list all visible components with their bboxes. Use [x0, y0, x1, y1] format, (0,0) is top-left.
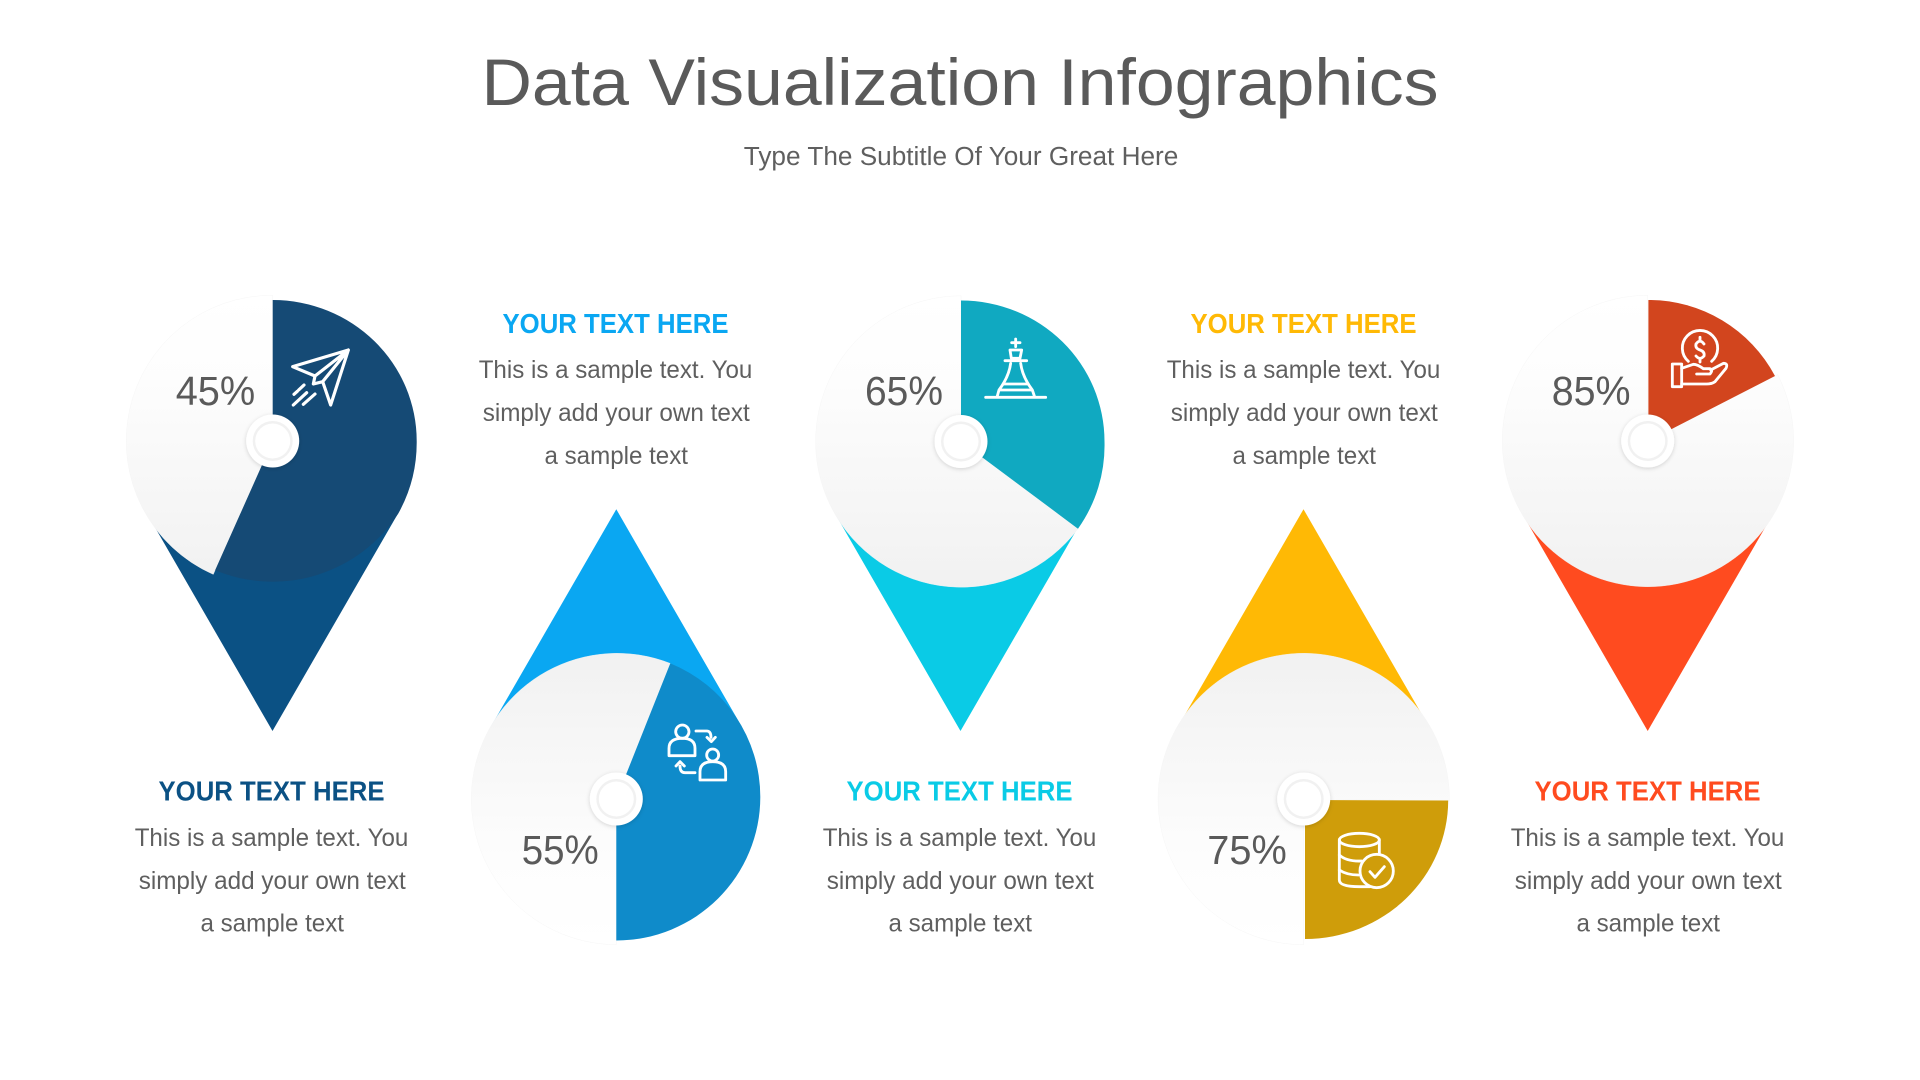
body: simply add your own text [1171, 399, 1438, 427]
pie chart [1158, 653, 1449, 945]
percentage: 45% [176, 368, 255, 414]
body: a sample text [544, 442, 688, 470]
hub [590, 772, 643, 826]
text block 2 [479, 308, 752, 470]
body [823, 824, 1096, 938]
pin pointer [491, 509, 742, 727]
pie chart [471, 653, 760, 945]
white sector [1158, 653, 1449, 945]
pin pointer [1522, 514, 1773, 731]
hub [934, 415, 988, 468]
heading: YOUR TEXT HERE [1534, 776, 1760, 807]
icon: database check [1339, 833, 1393, 888]
body [1167, 356, 1440, 470]
body [479, 356, 752, 470]
body: a sample text [200, 910, 344, 938]
heading: YOUR TEXT HERE [158, 776, 384, 807]
pin pointer [835, 514, 1086, 731]
coloured sector [1648, 300, 1775, 441]
pin 3: 65% [816, 296, 1105, 731]
pin pointer [1178, 509, 1429, 727]
pie chart [816, 296, 1105, 587]
pie chart [1502, 295, 1794, 587]
pin 2: 55% [471, 509, 760, 945]
white sector [471, 653, 670, 945]
percentage: 65% [865, 368, 943, 414]
coloured sector [961, 300, 1105, 529]
body: This is a sample text. You [1511, 824, 1784, 852]
body: This is a sample text. You [823, 824, 1096, 852]
body: a sample text [888, 910, 1032, 938]
body: simply add your own text [139, 867, 406, 895]
heading: YOUR TEXT HERE [502, 308, 728, 339]
coloured sector [616, 663, 760, 940]
coloured sector [213, 300, 417, 582]
heading: YOUR TEXT HERE [1190, 308, 1416, 339]
percentage: 55% [522, 827, 599, 873]
body [135, 824, 408, 938]
pin 5: 85% [1502, 295, 1794, 731]
white sector [816, 296, 1078, 587]
body: simply add your own text [827, 867, 1094, 895]
coloured sector [1305, 800, 1448, 939]
icon: chess king [986, 339, 1046, 397]
subtitle: Type The Subtitle Of Your Great Here [744, 143, 1178, 171]
body: a sample text [1576, 910, 1720, 938]
percentage: 75% [1207, 827, 1287, 873]
body [1511, 824, 1784, 938]
body: simply add your own text [1515, 867, 1782, 895]
body: This is a sample text. You [479, 356, 752, 384]
hub [246, 414, 299, 468]
body: This is a sample text. You [1167, 356, 1440, 384]
pin 4: 75% [1158, 509, 1449, 945]
body: simply add your own text [483, 399, 750, 427]
body: a sample text [1232, 442, 1376, 470]
pie chart [126, 295, 417, 582]
icon: hand with coin [1672, 330, 1727, 387]
text block 4 [1167, 308, 1440, 470]
icon: paper plane [293, 350, 348, 405]
icon: users exchange [669, 725, 726, 780]
pin pointer [147, 514, 398, 731]
text block 1 [135, 776, 408, 938]
pin 1: 45% [126, 295, 417, 731]
white sector [126, 295, 273, 574]
body: This is a sample text. You [135, 824, 408, 852]
percentage: 85% [1552, 368, 1630, 414]
text block 3 [823, 776, 1096, 938]
hub [1277, 772, 1330, 826]
white sector [1502, 295, 1794, 587]
hub [1621, 414, 1674, 468]
title: Data Visualization Infographics [482, 45, 1438, 119]
text block 5 [1511, 776, 1784, 938]
heading: YOUR TEXT HERE [846, 776, 1072, 807]
